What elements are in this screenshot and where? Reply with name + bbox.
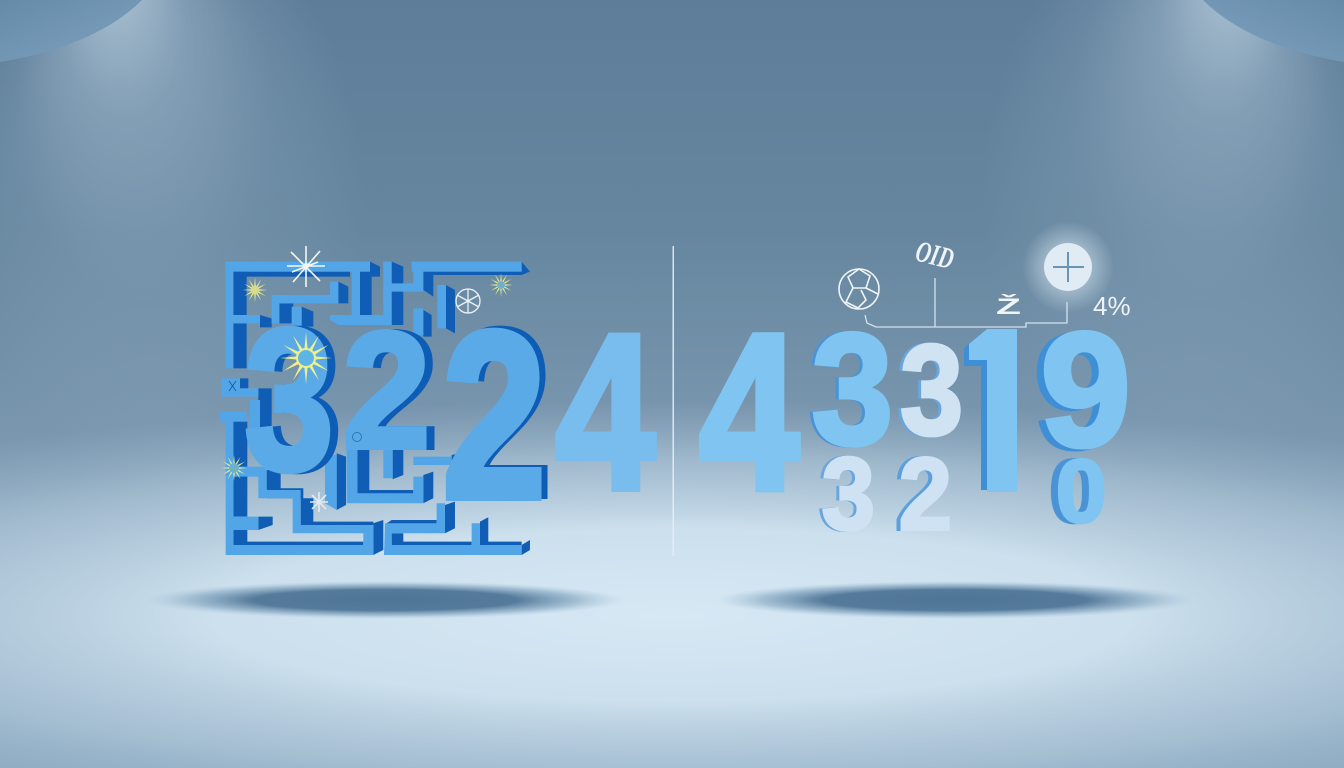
label: OID: OID <box>912 235 957 276</box>
icon: yellow star top right <box>489 273 513 297</box>
spotlight: left <box>0 0 365 490</box>
numeral 3, left: 3 <box>245 289 334 512</box>
label: 4%: 4% <box>1093 291 1131 321</box>
label: Z mark: Ž <box>996 294 1021 319</box>
maze shadow walls <box>233 262 530 555</box>
icon: soccer ball <box>839 269 879 309</box>
maze top walls <box>220 262 522 555</box>
connector lines <box>865 278 1067 327</box>
numeral 2, large: 2 <box>442 283 546 549</box>
numeral 3, blue: 3 <box>812 301 893 478</box>
numeral 2, large: 2 <box>448 281 552 547</box>
numeral 0: 0 <box>1049 442 1100 542</box>
numeral 9: 9 <box>1034 301 1124 482</box>
icon: snowflake <box>310 492 328 512</box>
numeral 0: 0 <box>1056 442 1107 542</box>
numeral 3, blue: 3 <box>809 301 890 478</box>
numeral 3, small: 3 <box>822 437 875 552</box>
floor shadow: right <box>715 581 1195 619</box>
spotlight: right <box>980 0 1344 490</box>
numeral 1: 1 <box>937 282 1054 542</box>
numeral 2, small: 2 <box>895 437 948 552</box>
numeral 2, middle left: 2 <box>343 298 430 483</box>
icon: white sparkle <box>287 246 325 287</box>
numeral 2, small: 2 <box>899 437 952 552</box>
numeral 3, pale: 3 <box>900 318 963 462</box>
numeral 9: 9 <box>1041 299 1131 480</box>
numeral 4, left group: 4 <box>555 288 655 536</box>
floor glow <box>0 395 1344 768</box>
icon: small cross marker <box>229 381 236 391</box>
numeral 3, left: 3 <box>253 289 342 512</box>
numeral 4, right group: 4 <box>699 288 799 536</box>
icon: small circle marker <box>352 432 362 442</box>
icon: yellow star large <box>280 332 332 384</box>
icon: plus button <box>1022 221 1114 313</box>
center divider <box>672 246 674 556</box>
numeral 1: 1 <box>932 282 1049 542</box>
numeral 3, small: 3 <box>819 437 872 552</box>
floor shadow: left <box>145 581 625 619</box>
numeral 3, pale: 3 <box>897 318 960 462</box>
icon: yellow star top left <box>243 278 267 302</box>
icon: wheel <box>456 289 480 313</box>
icon: yellow star lower left <box>221 455 247 481</box>
maze <box>220 262 530 555</box>
numeral 2, middle left: 2 <box>351 298 438 483</box>
numeral 1 <box>964 329 1017 492</box>
